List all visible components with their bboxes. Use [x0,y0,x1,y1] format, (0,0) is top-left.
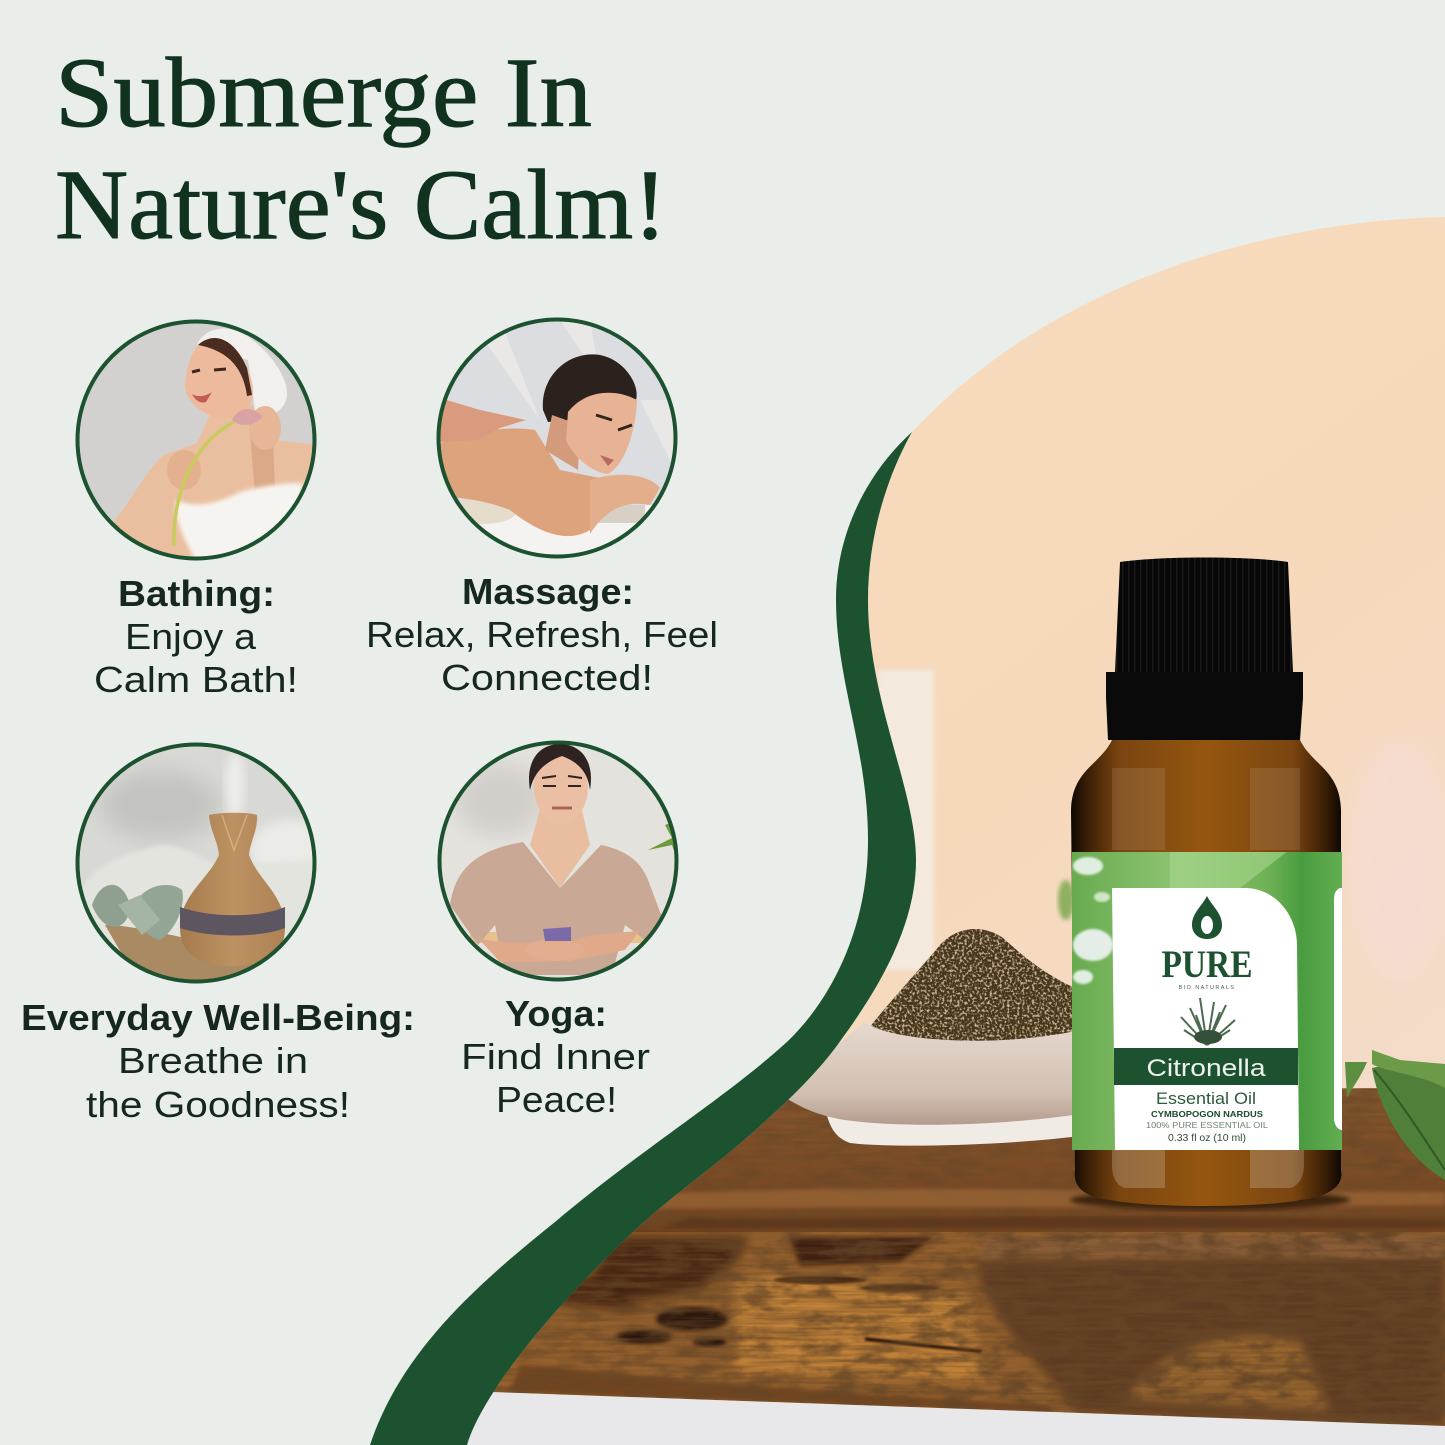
title [55,37,667,260]
leaf behind bottle [1058,880,1074,920]
title: Nature's Calm! [55,149,667,260]
circle photo: yoga [430,735,686,991]
text block: bathing: Enjoy a [125,616,257,657]
wooden board top [630,1088,1445,1235]
label background [1072,851,1342,1150]
sweater [450,842,665,975]
diffuser vase [180,813,285,966]
face [566,393,637,474]
towels and table [478,505,652,554]
label details: 100% PURE ESSENTIAL OIL [1146,1120,1268,1130]
text block: bathing: Calm Bath! [94,659,298,700]
plant [648,820,678,862]
text block: yoga: Yoga: [505,993,607,1034]
circle photo: bathing [70,315,320,565]
product bottle [1070,558,1350,1210]
neck [530,810,590,888]
steam [226,751,244,819]
logo subtitle: BIO NATURALS [1179,985,1235,991]
flower [174,422,234,546]
woman body [108,405,320,560]
forearm [590,475,660,534]
towel wrap [176,483,303,565]
eyes and lips [596,415,632,430]
product name band: Citronella [1146,1055,1266,1082]
forearms [478,930,640,962]
closed eyes and lips [542,776,582,786]
face [185,344,253,418]
text block: massage: Relax, Refresh, Feel [366,614,718,655]
table surface below board [440,1392,1445,1445]
eyes and lips [192,369,226,372]
masseur hands [440,398,526,442]
shaded arm [250,438,275,489]
bottle shadow [1070,1190,1350,1210]
light orange area [735,1276,985,1380]
lighter patch right [1125,1335,1330,1412]
text block: everyday well-being: Everyday Well-Being: [21,997,415,1038]
product name band [1114,1048,1298,1085]
icon: oil drop [1192,896,1222,939]
wooden board front face [440,1232,1445,1427]
label details [1146,1089,1268,1144]
label second panel [1334,888,1342,1130]
large dark area [975,1255,1445,1426]
hair [543,354,637,422]
amber glass body [1071,740,1341,1206]
ribbed cap [1115,558,1293,672]
photo panel: product scene [440,200,1445,1445]
crystal [543,927,571,941]
collar [1106,672,1303,740]
dark patches left [590,1237,747,1300]
neck [545,415,580,470]
bowl foot [827,1115,1072,1146]
brand logo [1162,896,1252,991]
text block: massage [366,571,718,698]
text block: yoga: Find Inner [461,1036,650,1077]
hair [198,338,252,396]
text block: yoga: Peace! [496,1079,617,1120]
label details: 0.33 fl oz (10 ml) [1168,1133,1246,1144]
circle photo: massage [430,312,684,566]
white label panel [1112,888,1299,1150]
shelf [470,932,646,943]
candle in background [878,670,934,970]
text block: massage: Connected! [441,657,653,698]
woman's back [436,429,600,536]
hands [249,406,281,450]
text block: bathing [94,573,298,700]
upper right strip [980,1236,1445,1258]
glass highlights [1112,768,1300,850]
label details: CYMBOPOGON NARDUS [1151,1109,1263,1119]
pink glow [1354,745,1444,968]
leaves on the right [1345,1050,1445,1180]
label details: Essential Oil [1156,1089,1256,1108]
towel on head [197,328,287,414]
hands [525,939,585,961]
text block: yoga [461,993,650,1120]
green wave band [370,432,916,1445]
logo wordmark: PURE [1162,943,1252,986]
powder mound [870,929,1072,1041]
woven mat [105,925,256,980]
text block: everyday well-being [21,997,415,1125]
text block: everyday well-being: Breathe in [118,1040,308,1081]
text block: massage: Massage: [462,571,634,612]
eucalyptus leaves [92,885,130,927]
text block: bathing: Bathing: [118,573,275,614]
head [534,750,588,824]
title: Submerge In [55,37,592,148]
bowl body [780,1022,1080,1125]
bowl of citronella powder [780,929,1080,1146]
water droplets [1073,857,1103,875]
text block: everyday well-being: the Goodness! [86,1084,350,1125]
cloth [80,845,320,950]
icon: citronella plant [1181,998,1235,1045]
circle photo: diffuser [76,742,316,984]
